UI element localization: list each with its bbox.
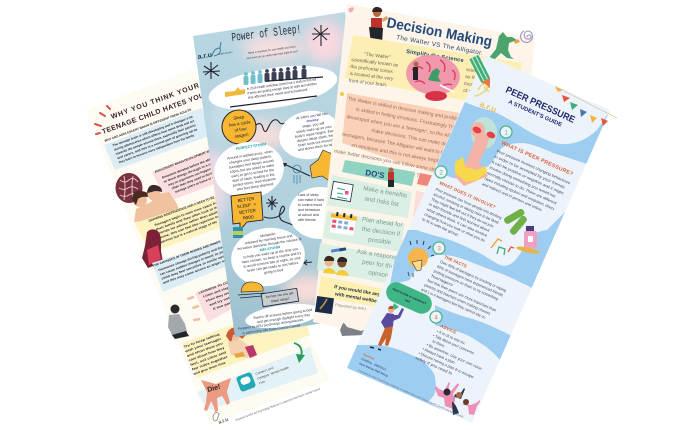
panel: yellow text block with woman: care about how they [188, 346, 225, 362]
text: sources: Kent Mental Well Being [359, 361, 389, 378]
panel: pink text block: often than they used to during the [171, 168, 221, 190]
footer credit: Prepared by ARU and Psychology Students in conjunction with Essex County Council [235, 387, 321, 422]
panel: peach explanation [332, 93, 510, 195]
section: what does it involve [421, 180, 505, 250]
blob: what helps: released by morning hours and [244, 234, 293, 245]
footer credit: in partnership with Essex County Council [242, 323, 300, 335]
blob: stages of sleep: At 14hrs you fall into [296, 112, 328, 120]
section: advice: • Be assertive. Use your own voice [426, 343, 482, 371]
panel: Do's header [342, 160, 415, 187]
panel: peach explanation: on emotions and this is not always helpful. To [351, 142, 451, 167]
logo: a.r.u [474, 84, 498, 114]
blob: what helps: increases alertness through the release of [237, 237, 302, 251]
blob: statistics with people icons: this affected their mood and schoolwork [248, 88, 308, 100]
section: the facts: and 1 in 4 teenagers feel they cannot say no [420, 288, 486, 320]
section: advice: • Always have a plan [422, 347, 455, 365]
panel: pink text block lower: and try not to take [209, 291, 244, 307]
text: sources [359, 352, 393, 378]
logo: a.r.u: a.r.u [197, 52, 213, 61]
badge: 3: 3 [438, 246, 442, 252]
panel: adolescent brain intro: during adolescence which affects how teens think and act [114, 119, 195, 152]
section: the facts: THE FACTS [444, 254, 468, 269]
callout: grey question box [261, 288, 299, 307]
text: the Walter description [348, 50, 400, 90]
blue wave bands [340, 102, 612, 430]
blob: perfect storm: teenagers feel sleepy around [229, 159, 274, 170]
panel: red don'ts header [417, 173, 445, 189]
blob: bottom tip [244, 300, 322, 332]
panel: pink text block: to think things through in a calm [163, 160, 217, 184]
logo: a.r.u: a.r.u [218, 417, 229, 426]
callout: yellow circle sleep cycle: of four [234, 126, 248, 133]
icon: row of nine people [244, 65, 306, 85]
icon: yellow spark [340, 92, 344, 96]
blob: perfect storm: perfect storm, tired students [232, 177, 276, 188]
section: what is peer pressure: types including spoken and unspoken, direct [484, 176, 556, 211]
callout: green speech bubble: Ask [404, 298, 411, 304]
section: the facts: 60% of teenagers have experienced friends [436, 265, 504, 298]
icon: rising sun [238, 282, 265, 298]
section: what is peer pressure [481, 140, 575, 218]
text: contact details: Category: Mental Health [257, 365, 290, 381]
section: advice: to them. [432, 339, 446, 349]
panel: yellow text block: GROWING INDEPENDENCE AND A NEED TO BE [148, 195, 215, 223]
title: WHY YOU THINK YOUR [110, 82, 200, 121]
icon: green alligator [489, 32, 520, 59]
panel: blue text block: can cause sudden changes in mood, so your [159, 248, 227, 276]
text: alligator description: scientifica [466, 67, 488, 76]
text: alligator description [463, 60, 489, 97]
icon: three women cheering [435, 382, 480, 415]
blob: what helps: to help you wake up at the time you [243, 247, 298, 259]
blob: perfect storm: who feel sleep deprived [236, 182, 273, 192]
section: what does it involve: changing how you look or what you do [424, 212, 486, 243]
blob: what helps: Melatonin [260, 232, 276, 238]
panel: yellow Simplify the Science [345, 35, 522, 110]
icon: pink medicine bottle [516, 226, 540, 255]
panel: adolescent brain intro: towards the people around them, especially their parents [115, 123, 197, 156]
section: the facts: Over 50% of teenagers try smoking or vaping [439, 260, 507, 293]
panel: pink text block [152, 148, 223, 202]
section: advice: • Talk about your concerns [432, 334, 475, 355]
panel: pink text block lower: LEARNING TO COPE [198, 279, 233, 295]
icon: dark QR square [315, 296, 334, 314]
panel: blue text block: child may feel sensitive or easily upset [161, 253, 228, 281]
icon: green curved arrow [294, 343, 305, 363]
panel: yellow text block with woman: fair rules together [191, 354, 229, 371]
card: ask a responsible peer: Ask a responsible [356, 248, 407, 263]
blob: statistics with people icons [206, 58, 340, 118]
icon: red burst ticks [95, 106, 110, 134]
panel: pink text block lower: Listen and stay calm [203, 282, 238, 299]
logo: a.r.u: a.r.u [478, 99, 498, 114]
icon: checklist [331, 181, 353, 202]
text: contact details: Contact Level [255, 366, 274, 376]
panel: yellow text block with woman: with your teenager [183, 336, 223, 354]
card: make a benefits and risks list: and risks list [364, 195, 399, 208]
blob: right middle: and behaviour [298, 208, 321, 212]
blob: what helps: have chosen, so keep a routine and try [241, 251, 302, 264]
panel: yellow text block with woman: feel, set clear and [190, 350, 227, 367]
footer credit: Prepared by ARU Psychology students in collaboration with Essex County Council and local schools [358, 369, 465, 419]
panel: blue text block [152, 238, 230, 292]
callout: grey question box: better sleep? [271, 297, 290, 303]
panel: support call to action: If you would like any more info [334, 284, 404, 302]
text: contact details [255, 361, 291, 385]
footer credit [238, 318, 304, 336]
footer credit: Prepared by ARU psychology undergraduates [238, 318, 304, 331]
blob: right middle: Lack of sleep [298, 193, 319, 197]
blob: stages of sleep: and stores them for later [298, 142, 337, 152]
panel: adolescent brain intro: The teenage brain is still developing and it changes a lot [112, 115, 193, 147]
text: sources: Sources [363, 352, 375, 361]
icon: grey bird [340, 323, 368, 336]
card: ask a responsible peer [317, 243, 407, 285]
sheet: Peer Pressure student's guide [340, 55, 617, 430]
text: alligator description: located [464, 81, 480, 89]
callout: yellow circle sleep cycle: has a cycle [228, 119, 251, 128]
callout: yellow circle sleep cycle [222, 110, 256, 144]
blob: stages of sleep [276, 106, 344, 164]
icon: small green and blue flag [233, 227, 243, 238]
blob: bottom tip: Switch off screens before going to bed [253, 308, 313, 320]
panel: yellow text block: Teenagers begin to want more space from [154, 199, 221, 227]
subtitle lines: How much do you really need each night for you? [246, 49, 299, 60]
icon: pencil [469, 55, 494, 90]
sheet: Decision Making [313, 4, 535, 345]
panel: yellow text block: parents but is a natural stage of life [160, 220, 218, 244]
panel: yellow text block [135, 194, 228, 253]
panel: peach explanation: is skilled in feeling emotions. Frustratingly The Walter is not fully [355, 107, 496, 138]
blob: stages of sleep: deeper sleep starts, the [297, 133, 334, 143]
blob: right middle: with friends [298, 218, 316, 222]
panel: peach explanation: The Walter is skilled in decision making and problem solving, The Alligator [347, 96, 510, 132]
blob: right middle: to control mood [298, 203, 322, 207]
blob: what helps: to avoid screens late at night, so your [243, 256, 302, 269]
text: alligator description: "The [473, 61, 484, 68]
panel: blue text block: Hormones change during puberty and they [158, 244, 225, 272]
icon: calendar [329, 211, 357, 236]
sheet: Power of Sleep [193, 12, 346, 337]
callout: grey question box: So how can you get [265, 291, 294, 299]
blob: right middle: at school and [298, 213, 319, 217]
blob: perfect storm [210, 137, 288, 203]
panel: Do's header: DO'S [365, 168, 386, 180]
blob: stages of sleep: brain sorts out memory [298, 138, 334, 147]
card: make a benefits and risks list [327, 175, 412, 218]
badge: 1 [500, 126, 512, 138]
text: the Walter description: "The Walter" [364, 51, 391, 61]
arrow: squiggle to text blob [256, 120, 285, 132]
icon: chat tile [236, 372, 256, 392]
card: make a benefits and risks list: Make a benefits [363, 185, 408, 200]
callout: better sleep better mood: SLEEP = [237, 202, 257, 210]
title: Decision Making [385, 15, 493, 50]
blob: what helps: brain can get ready to rest before [247, 261, 299, 273]
blob: right middle: can make it hard [298, 198, 324, 202]
heading: Simplify the Science [406, 49, 464, 64]
blob: what helps: going to bed [264, 268, 283, 275]
badge: 1: 1 [504, 130, 508, 136]
arrow: from starburst to blob [282, 163, 310, 176]
section: what does it involve: in with friends and feel worried about [428, 202, 491, 233]
card: ask a responsible peer: peer for their [362, 259, 398, 271]
section: what is peer pressure: involve doing something you would not [489, 166, 557, 199]
section: what does it involve: alcohol, smoking or taking risks to be liked. [433, 192, 500, 225]
panel: blue text block: THE CHANGES IN THEIR BODIES AND MINDS [152, 240, 221, 268]
panel: blue text block: and this may come across as anger or [162, 258, 227, 285]
panel: pink text block lower [195, 277, 246, 322]
blob: what helps: MELATONIN [260, 245, 281, 252]
callout: better sleep better mood: BETTER [239, 208, 256, 216]
icon: person waving [370, 306, 404, 350]
icon: green bottles [503, 208, 528, 236]
background colour clouds [199, 20, 345, 306]
section: what does it involve: Peer pressure can force people into drinking [435, 187, 502, 220]
card: plan ahead: the decision if [361, 226, 401, 238]
blob: what helps [227, 223, 309, 291]
logo: a.r.u [197, 42, 233, 61]
section: the facts: feel that their peers are more important than [427, 278, 497, 313]
text: the Walter description: the prefrontal cortex [350, 64, 394, 75]
section: what does it involve: what others think. It can also involve [426, 207, 488, 238]
section: what is peer pressure: It can be positive or negative and it might [491, 160, 565, 196]
panel: pink don'ts card [410, 191, 445, 255]
section: what is peer pressure: and indirect and in-person and online. [481, 182, 543, 212]
title: TEENAGE CHILD HATES YOU [101, 92, 205, 136]
title: PEER PRESSURE [504, 85, 577, 126]
section: what is peer pressure: Peer pressure involves changing behaviours [496, 149, 571, 185]
logo: a.r.u: Anglia Ruskin [218, 51, 233, 56]
section: what does it involve: They might feel left out if they do not join [430, 197, 494, 229]
logo: a.r.u [213, 412, 229, 426]
callout: better sleep better mood [231, 192, 263, 230]
blob: stages of sleep: body's repair begins, then [295, 129, 335, 139]
arrow: curl to blob [264, 206, 293, 225]
credit: prepared by: Prepared by ARU [335, 302, 366, 311]
title: Power of Sleep! [231, 23, 302, 45]
blob: perfect storm: 10pm, but are asked to wake [229, 163, 275, 174]
panel: yellow text block with woman: and give them time [193, 361, 226, 376]
panel: support call to action [318, 276, 405, 310]
icon: pink brain with walter and alligator [403, 51, 463, 101]
section: the facts: Teenagers [430, 274, 454, 287]
arrow: to melatonin blob [304, 260, 312, 265]
icon: yellow starburst [310, 150, 342, 182]
blob: stages of sleep: slowly wake up as your [296, 124, 333, 134]
panel: yellow text block: home, this can feel like rejection to the [158, 212, 226, 240]
section: advice: ADVICE [440, 323, 457, 335]
panel: yellow text block: their family and they often look to their [155, 203, 223, 231]
blob: stages of sleep: drowsy [306, 118, 319, 123]
badge: 4 [430, 311, 442, 323]
blob: perfect storm: Around in adolescence, when [227, 149, 273, 161]
icon: light bulb [408, 240, 434, 277]
blob: statistics with people icons: In 2019 health scientists carried out a study to find out [247, 77, 316, 91]
icon: group of figures shouting: Die! [207, 384, 221, 394]
section: what is peer pressure: normally choose to do. There are different [486, 171, 558, 206]
section: advice: • It is ok to say no. [436, 329, 466, 346]
section: what is peer pressure: WHAT IS PEER PRESSURE? [500, 140, 574, 178]
icon: dreamcatcher [293, 165, 301, 184]
icon: waiter character [369, 7, 388, 44]
badge: 2: 2 [440, 170, 444, 176]
text: alligator description: as th [465, 74, 476, 81]
blob: right middle [289, 187, 351, 239]
panel: adolescent brain intro: they learn to become more independent from the family [118, 133, 195, 164]
callout: green speech bubble: Need to talk to someone? [392, 287, 427, 305]
text: the Walter description: scientifically known as [351, 57, 399, 69]
card: plan ahead: possible [368, 236, 392, 246]
icon: bunting [555, 86, 617, 126]
panel: support call to action: with mental wellbeing support [333, 291, 404, 309]
icon: group of figures shouting [201, 378, 231, 412]
panel: pink text block: way so arguments can happen more [167, 164, 220, 187]
icon: spiral [521, 31, 533, 42]
blob: stages of sleep: stage, you will [302, 121, 325, 129]
icon: yellow bed [225, 87, 245, 97]
subtitle lines [246, 44, 299, 60]
panel: peach explanation: make decisions. This can make decisions hard for [371, 128, 481, 154]
icon: stars [203, 25, 330, 210]
panel: pink text block: teenage years at home or school [174, 172, 223, 194]
icon: pink heart [348, 7, 354, 13]
subtitle: A STUDENT'S GUIDE [507, 99, 563, 129]
panel: yellow text block with woman: and show them you [186, 341, 223, 358]
callout: better sleep better mood: BETTER [237, 196, 255, 204]
panel: pink text block lower: when they are upset [204, 287, 240, 303]
badge: 2 [435, 166, 447, 178]
icon: woman with red sunglasses [454, 117, 497, 186]
callout: yellow circle sleep cycle: Sleep [233, 114, 245, 121]
panel: adolescent brain intro: and carers, and this is a normal part of growing up as [117, 127, 198, 160]
panel: peach explanation: developed when you are a 'teenager', so the Alligator may [346, 114, 474, 143]
panel: yellow text block: friends for advice rather than adults at [157, 208, 224, 236]
subtitle: The Walter VS The Alligator. [396, 34, 484, 57]
section: the facts: parents and teachers when making choices [424, 283, 491, 316]
panel: adolescent brain intro [104, 108, 212, 170]
card: plan ahead: Plan ahead for [361, 216, 403, 229]
blob: perfect storm: early to get to school for the [231, 168, 274, 179]
card: plan ahead [323, 211, 405, 252]
panel: yellow text block with woman [182, 300, 310, 378]
text: the Walter description: front of your brain. [348, 78, 388, 89]
panel: adolescent brain intro: WHY AND ADOLESCENT BRAIN IS DIFFERENT FROM ADULTS [104, 108, 192, 143]
callout: better sleep better mood: MOOD [242, 214, 254, 222]
icon: woman with red hair [142, 229, 163, 268]
panel: contact blue band [197, 347, 318, 410]
text: alligator description: of th [463, 88, 473, 95]
card: ask a responsible peer: opinion [368, 269, 389, 279]
panel: peach explanation: make better decisions you can follow some steps [333, 148, 442, 174]
icon: sitting teenager with pointing hands [168, 296, 200, 339]
sheet: Why you think your teenage child hates you [86, 69, 330, 426]
section: what does it involve: to fit in with the group. [421, 217, 460, 237]
badge: 3 [433, 242, 445, 254]
subtitle lines: Sleep is important for your health and mood [248, 44, 296, 55]
section: advice: safely if you need to [415, 356, 453, 376]
panel: pink text block: Emotions develop before the ability [161, 156, 215, 180]
section: the facts: putting pressure on them to try something [433, 269, 499, 301]
icon: brain [116, 173, 142, 203]
section: advice [415, 319, 492, 386]
icon: two people talking [323, 247, 349, 276]
callout: yellow circle sleep cycle: stages! [234, 132, 249, 139]
panel: peach explanation: teenagers, because The Alligator will want to focus [342, 132, 454, 158]
callout: green speech bubble [383, 279, 435, 317]
section: what is peer pressure: in order to be accepted by your friends. [494, 155, 566, 190]
icon: music notes [491, 239, 514, 255]
badge: 4: 4 [434, 316, 438, 322]
panel: pink text block: ADOLESCENT BRAIN DEVELOPMENT AND [154, 148, 214, 174]
blob: perfect storm: PERFECT STORM [236, 142, 266, 151]
icon: two teenagers [132, 185, 179, 222]
blob: statistics with people icons: if teens are getting enough sleep at night and whether [247, 82, 318, 95]
section: what does it involve: WHAT DOES IT INVOLVE? [439, 180, 497, 210]
panel: peach explanation: to help you be more like The Walter [362, 163, 441, 183]
text: contact details: Free [258, 379, 266, 385]
section: advice: • Discuss having a plan B to escape [418, 351, 474, 379]
text: the Walter description: is located at the very [349, 71, 394, 82]
blob: perfect storm: start of class, leading to the [232, 172, 275, 183]
section: the facts [420, 251, 510, 323]
panel: pink text block lower: it too personally [212, 295, 246, 311]
blob: bottom tip: and get enough daylight every day [257, 313, 311, 324]
blob: perfect storm: changes your sleep pattern, [229, 154, 272, 165]
panel: yellow text block with woman: Try to keep talking [183, 332, 220, 349]
text: sources: Childline - 08001111 [361, 357, 387, 372]
